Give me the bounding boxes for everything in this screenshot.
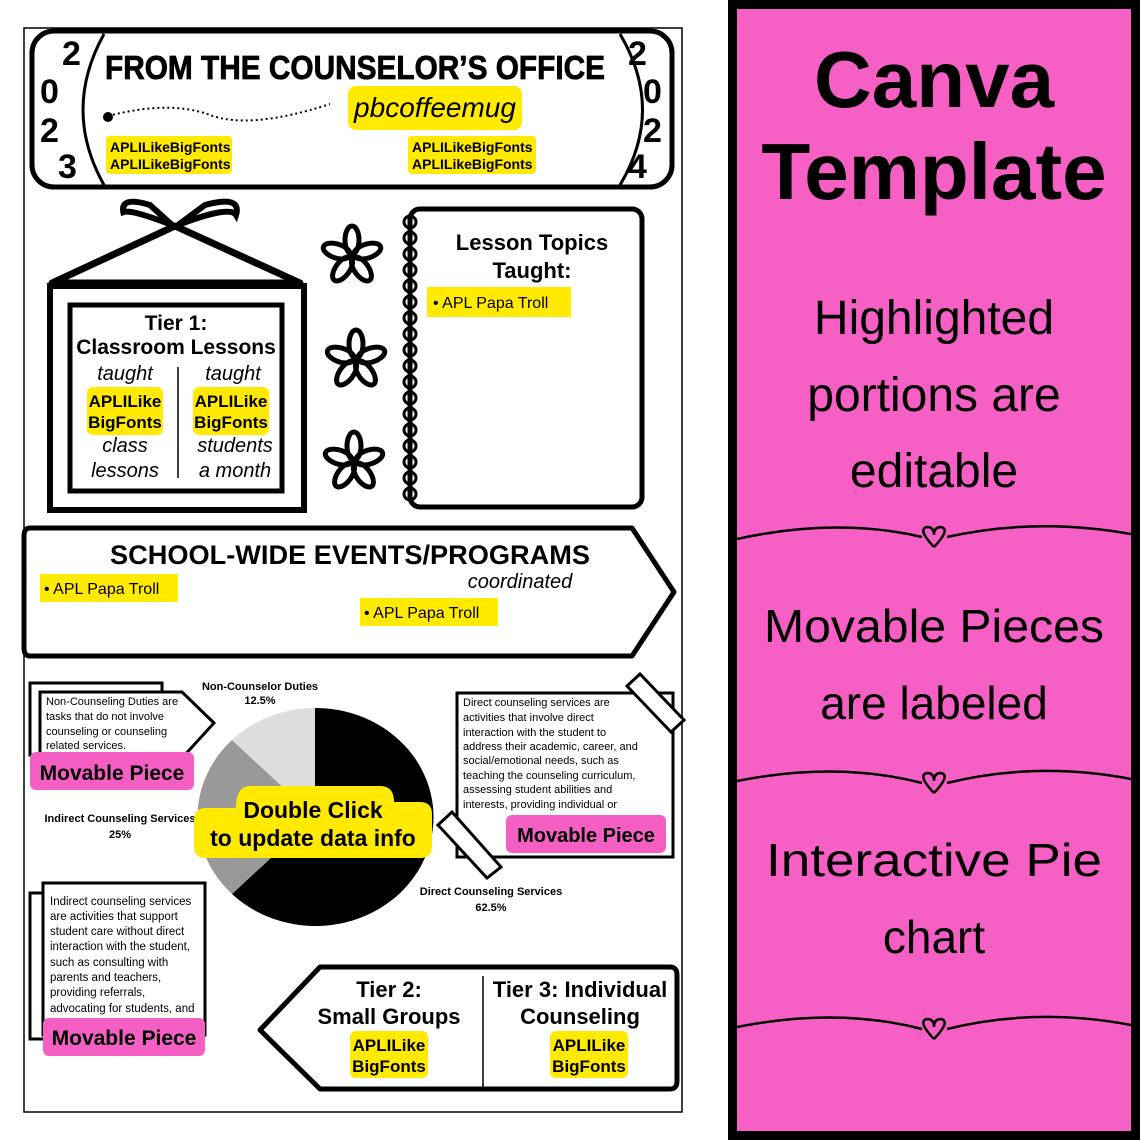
left infographic page [22, 27, 686, 1113]
tier 2/3 arrow banner [260, 967, 677, 1090]
divider 3 [737, 1017, 1131, 1029]
callout: double click: Double Click [243, 797, 383, 823]
name tag [348, 86, 522, 130]
pie chart: Direct Counseling Services [420, 886, 562, 898]
movable: direct counseling: interests, providing individual or [463, 799, 617, 811]
tier 1 frame: taught [205, 363, 262, 385]
year 2023 [40, 35, 81, 186]
pie chart: Non-Counselor Duties [202, 681, 318, 693]
tier 1 frame: lessons [91, 460, 159, 482]
header banner: APLILikeBigFonts [110, 139, 231, 155]
year 2024: 4 [628, 148, 647, 186]
school-wide events arrow banner: coordinated [468, 571, 573, 593]
notebook: lesson topics [404, 209, 642, 507]
text: movable pieces: Movable Pieces [764, 600, 1104, 652]
year 2023: 3 [58, 148, 77, 186]
callout: double click [194, 786, 432, 858]
text: highlighted portions [807, 292, 1061, 498]
text: interactive pie [766, 834, 1102, 963]
text: interactive pie: chart [883, 911, 985, 963]
tier 1 frame: APLILike [195, 392, 267, 411]
icons: flowers [321, 226, 387, 490]
movable: indirect counseling: interaction with the student, [50, 941, 190, 953]
dotted line [108, 104, 330, 120]
movable: direct counseling [438, 674, 684, 878]
movable: direct counseling: Movable Piece [517, 825, 655, 847]
left highlights [106, 136, 232, 174]
movable: non-counseling: counseling or counseling [46, 726, 167, 738]
title: FROM THE COUNSELOR’S OFFICE [105, 49, 605, 86]
movable: direct counseling: teaching the counseling curriculum, [463, 770, 635, 782]
tier 1 frame: class [102, 435, 148, 457]
movable: non-counseling: related services. [46, 740, 126, 752]
pie chart: 25% [109, 829, 131, 841]
tier 2/3 arrow banner: Tier 3: Individual [493, 977, 667, 1002]
tier 1 frame: students [197, 435, 273, 457]
year 2024: 2 [643, 112, 662, 150]
movable: indirect counseling: are activities that support [50, 911, 179, 923]
text: interactive pie: Interactive Pie [766, 834, 1102, 886]
movable: direct counseling: assessing student abilities and [463, 784, 612, 796]
notebook: lesson topics: Taught: [492, 258, 572, 283]
divider 1 [737, 526, 1131, 539]
movable: direct counseling: activities that involve direct [463, 712, 594, 724]
year 2024: 0 [643, 73, 662, 111]
school-wide events arrow banner [24, 528, 674, 656]
school-wide events arrow banner: • APL Papa Troll [44, 581, 159, 598]
school-wide events arrow banner: • APL Papa Troll [364, 605, 479, 622]
year 2024: 2 [628, 35, 647, 73]
text: highlighted portions: Highlighted [814, 292, 1054, 345]
right highlights [408, 136, 536, 174]
header banner: APLILikeBigFonts [110, 156, 231, 172]
movable: non-counseling: tasks that do not involve [46, 711, 164, 723]
tier 1 frame: a month [199, 460, 271, 482]
movable: indirect counseling [30, 883, 205, 1056]
tier 1 frame: BigFonts [88, 413, 162, 432]
year 2024 [628, 35, 662, 186]
notebook: lesson topics: Lesson Topics [456, 230, 608, 255]
movable: direct counseling: interaction with the student to [463, 727, 606, 739]
tier 2/3 arrow banner: BigFonts [352, 1057, 426, 1076]
text: movable pieces: are labeled [820, 677, 1048, 729]
tier 1 frame: BigFonts [194, 413, 268, 432]
movable: indirect counseling: Indirect counseling services [50, 896, 192, 908]
movable: indirect counseling: student care without direct [50, 926, 185, 938]
tier 2/3 arrow banner: Tier 2: [356, 977, 422, 1002]
tier 1 frame: Tier 1: [145, 312, 207, 335]
year 2023: 0 [40, 73, 59, 111]
movable: indirect counseling: Movable Piece [52, 1027, 196, 1050]
heading: Canva Template [761, 35, 1107, 216]
notebook: lesson topics: • APL Papa Troll [433, 295, 548, 312]
header banner: APLILikeBigFonts [412, 156, 533, 172]
pie chart: Indirect Counseling Services [44, 813, 196, 825]
heading: Canva Template: Template [761, 127, 1107, 216]
movable: indirect counseling: advocating for students, and [50, 1003, 194, 1015]
heading: Canva Template: Canva [814, 35, 1055, 124]
header banner: APLILikeBigFonts [412, 139, 533, 155]
movable: direct counseling: social/emotional needs, such as [463, 755, 619, 767]
header banner [32, 31, 672, 187]
tier 2/3 arrow banner: Counseling [520, 1004, 640, 1029]
header banner: pbcoffeemug [353, 92, 516, 123]
movable: indirect counseling: parents and teachers, [50, 972, 161, 984]
tier 2/3 arrow banner: APLILike [353, 1036, 425, 1055]
school-wide events arrow banner: SCHOOL-WIDE EVENTS/PROGRAMS [110, 540, 590, 570]
divider 2 [737, 771, 1131, 783]
movable: non-counseling: Non-Counseling Duties are [46, 696, 178, 708]
movable: indirect counseling: such as consulting with [50, 957, 168, 969]
pie chart [44, 681, 562, 926]
movable: direct counseling: Direct counseling services are [463, 697, 610, 709]
text: movable pieces [764, 600, 1104, 729]
tier 1 frame: taught [97, 363, 154, 385]
movable: non-counseling [30, 683, 214, 790]
movable: direct counseling: address their academic, career, and [463, 741, 638, 753]
year 2023: 2 [62, 35, 81, 73]
text: highlighted portions: editable [850, 445, 1018, 498]
pie chart: 62.5% [475, 902, 507, 914]
tier 1 frame: Classroom Lessons [76, 336, 276, 359]
callout: double click: to update data info [210, 825, 416, 851]
year 2023: 2 [40, 112, 59, 150]
pink side panel [728, 0, 1140, 1140]
movable: indirect counseling: providing referrals, [50, 987, 145, 999]
tier 1 frame [50, 202, 304, 510]
tier 2/3 arrow banner: BigFonts [552, 1057, 626, 1076]
tier 2/3 arrow banner: APLILike [553, 1036, 625, 1055]
pie chart: 12.5% [244, 695, 276, 707]
movable: non-counseling: Movable Piece [40, 762, 184, 785]
tier 2/3 arrow banner: Small Groups [317, 1004, 461, 1029]
text: highlighted portions: portions are [807, 369, 1061, 422]
tier 1 frame: APLILike [89, 392, 161, 411]
